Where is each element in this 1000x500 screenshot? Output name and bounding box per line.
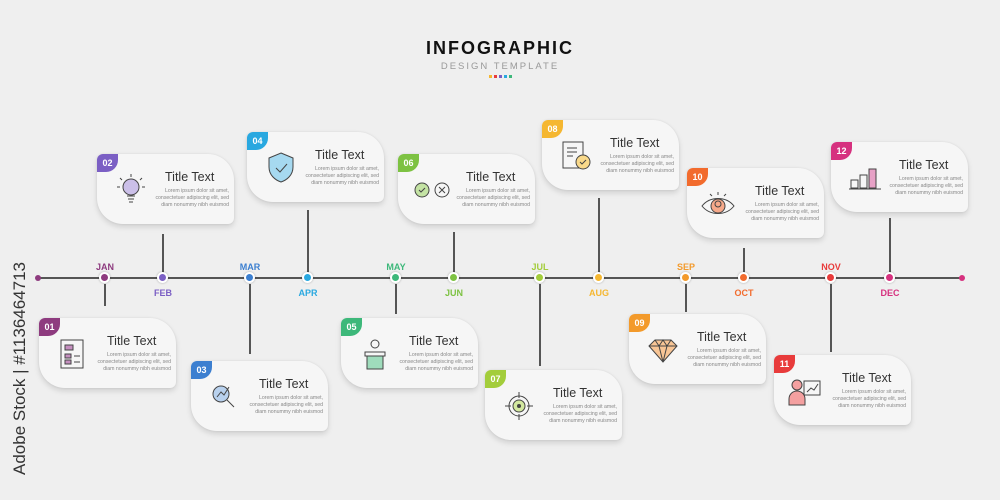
card 09: Lorem ipsum dolor sit amet, consectetuer adipiscing elit, sed diam nonummy nibh euismod [687,348,761,368]
card 08: Title Text [610,136,659,150]
card 08 [542,120,679,190]
icon: magnifier [212,386,234,408]
card 04 [247,132,384,202]
card 06: Title Text [466,170,515,184]
card 05: Lorem ipsum dolor sit amet, consectetuer adipiscing elit, sed diam nonummy nibh euismod [399,352,473,372]
text: JUL [531,262,548,272]
text: MAY [386,262,406,272]
card 05 [341,318,478,388]
card 06: 06 [403,158,414,168]
icon: document [60,340,84,368]
month markers [99,272,110,283]
title: DESIGN TEMPLATE [441,61,559,72]
watermark: vertical stock id: Adobe Stock | #1136464713 [10,262,29,475]
icon: shield [268,152,294,182]
card 03: Lorem ipsum dolor sit amet, consectetuer adipiscing elit, sed diam nonummy nibh euismod [249,395,323,415]
icon: diamond [648,339,678,363]
connector lines [104,284,106,306]
icon: presenter [788,380,820,406]
card 09: 09 [634,318,644,328]
icon: eye [702,192,734,214]
card 04: Title Text [315,148,364,162]
icon: target [505,392,533,420]
card 03: Title Text [259,377,308,391]
card 02 [97,154,234,224]
card 11: Title Text [842,371,891,385]
text: JAN [96,262,114,272]
title [426,38,574,78]
icon: podium [364,340,386,370]
card 12: 12 [836,146,846,156]
card 01 [39,318,176,388]
icon: check and cross [414,182,450,198]
timeline axis [38,277,962,278]
card 06: Lorem ipsum dolor sit amet, consectetuer adipiscing elit, sed diam nonummy nibh euismod [456,188,530,208]
text: JUN [445,288,463,298]
card 10 [687,168,824,238]
text: SEP [677,262,695,272]
card 03: 03 [196,365,206,375]
card 11 [774,355,911,425]
card 04: Lorem ipsum dolor sit amet, consectetuer adipiscing elit, sed diam nonummy nibh euismod [305,166,379,186]
card 10: Lorem ipsum dolor sit amet, consectetuer adipiscing elit, sed diam nonummy nibh euismod [745,202,819,222]
text: AUG [589,288,609,298]
card 01: Title Text [107,334,156,348]
text: NOV [821,262,841,272]
card 05: Title Text [409,334,458,348]
card 10: 10 [692,172,702,182]
card 07: Lorem ipsum dolor sit amet, consectetuer adipiscing elit, sed diam nonummy nibh euismod [543,404,617,424]
icon: approved document [562,142,590,170]
card 12: Title Text [899,158,948,172]
text: APR [298,288,318,298]
card 01: Lorem ipsum dolor sit amet, consectetuer adipiscing elit, sed diam nonummy nibh euismod [97,352,171,372]
card 07: 07 [490,374,500,384]
card 12 [831,142,968,212]
icon: bar chart [849,168,881,190]
card 04: 04 [252,136,262,146]
card 02: 02 [102,158,112,168]
card 07: Title Text [553,386,602,400]
card 08: Lorem ipsum dolor sit amet, consectetuer adipiscing elit, sed diam nonummy nibh euismod [600,154,674,174]
card 10: Title Text [755,184,804,198]
text: FEB [154,288,172,298]
text: OCT [734,288,754,298]
card 06 [398,154,535,224]
card 02: Title Text [165,170,214,184]
text: DEC [880,288,900,298]
text: MAR [240,262,260,272]
card 12: Lorem ipsum dolor sit amet, consectetuer adipiscing elit, sed diam nonummy nibh euismod [889,176,963,196]
card 02: Lorem ipsum dolor sit amet, consectetuer adipiscing elit, sed diam nonummy nibh euismod [155,188,229,208]
card 09: Title Text [697,330,746,344]
card 07 [485,370,622,440]
card 01: 01 [44,322,54,332]
card 11: Lorem ipsum dolor sit amet, consectetuer adipiscing elit, sed diam nonummy nibh euismod [832,389,906,409]
card 03 [191,361,328,431]
icon: bulb [117,174,145,202]
title: INFOGRAPHIC [426,38,574,58]
card 11: 11 [780,359,789,369]
card 05: 05 [346,322,356,332]
card 08: 08 [547,124,558,134]
card 09 [629,314,766,384]
